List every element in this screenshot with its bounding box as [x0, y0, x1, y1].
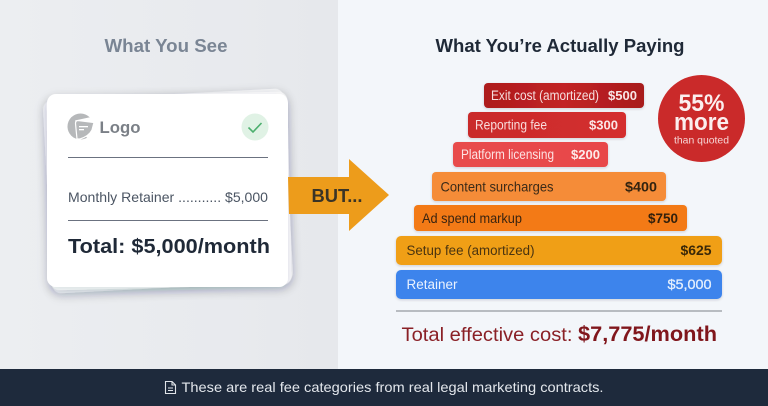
logo text: Logo: [100, 118, 140, 137]
bar: content surcharges: $400: [625, 178, 657, 194]
bar: content surcharges: [432, 172, 666, 201]
bar: ad spend markup: [414, 205, 687, 231]
panel: left background: [0, 0, 338, 369]
badge: 55% more: than quoted: [674, 134, 729, 146]
bar: reporting fee: $300: [589, 118, 618, 132]
bar: exit cost: Exit cost (amortized): [491, 88, 599, 103]
arrow: but: BUT...: [312, 185, 362, 206]
badge: 55% more: 55%: [678, 90, 724, 117]
line item: Monthly Retainer ........... $5,000: [68, 189, 268, 205]
bar: platform licensing: [453, 142, 608, 167]
badge: 55% more: more: [674, 109, 729, 136]
bar: exit cost: $500: [608, 88, 637, 103]
icon: document: [166, 382, 176, 394]
bar: reporting fee: Reporting fee: [475, 118, 547, 132]
panel: right background: [338, 0, 768, 369]
bar: platform licensing: Platform licensing: [461, 147, 554, 162]
bar chart: fee stack: [396, 83, 722, 299]
arrow: but: [288, 159, 389, 231]
total effective cost: $7,775/month: [578, 323, 717, 346]
icon: logo mark: [68, 114, 96, 141]
footer bar: [0, 369, 768, 406]
invoice card: [47, 94, 288, 287]
bar: reporting fee: [468, 112, 626, 138]
bar: setup fee: [396, 236, 722, 265]
bar: ad spend markup: Ad spend markup: [422, 210, 522, 226]
bar: setup fee: $625: [680, 242, 712, 258]
footer note: These are real fee categories from real legal marketing contracts.: [182, 379, 604, 395]
bar: retainer: Retainer: [406, 277, 458, 292]
badge: 55% more: [658, 75, 745, 162]
bar: content surcharges: Content surcharges: [440, 178, 554, 194]
bar: ad spend markup: $750: [648, 210, 678, 226]
panel: invoice card stack: [43, 88, 293, 294]
bar: retainer: $5,000: [668, 276, 712, 292]
bar: retainer: [396, 270, 722, 299]
heading: what you see: What You See: [104, 35, 228, 56]
bar: setup fee: Setup fee (amortized): [406, 243, 534, 258]
icon: check badge: [242, 114, 268, 140]
heading: what you're actually paying: What You’re Actually Paying: [436, 35, 684, 56]
bar: platform licensing: $200: [571, 147, 600, 162]
bar: exit cost: [484, 83, 644, 108]
invoice total: Total: $5,000/month: [68, 235, 270, 258]
total effective cost: Total effective cost:: [402, 324, 572, 346]
